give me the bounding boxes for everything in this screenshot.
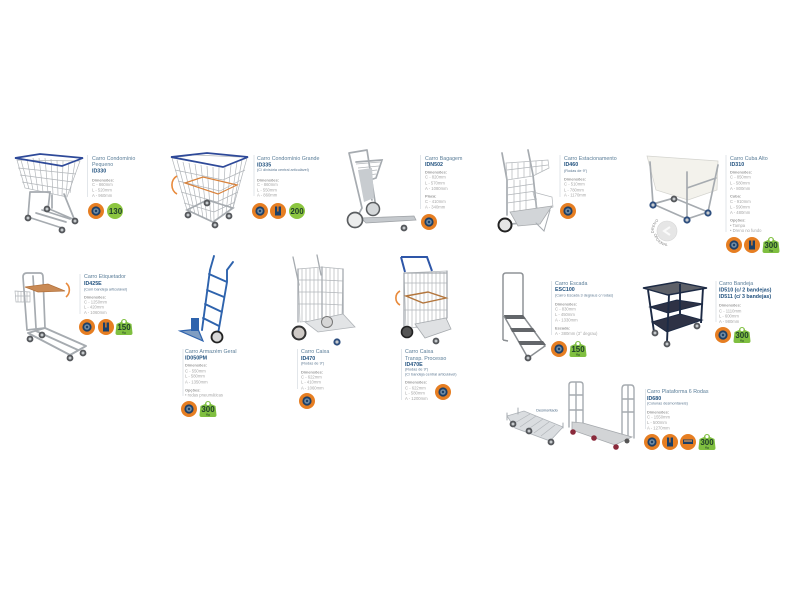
text: plataforma: ID680 bbox=[647, 396, 661, 402]
text: bagagem: C - 820mm bbox=[425, 175, 446, 180]
text: bandeja: ID510 (c/ 2 bandejas) bbox=[719, 288, 772, 294]
product: Carro Armazém Geral bbox=[180, 256, 237, 417]
text: etiquetador: ID425E bbox=[84, 281, 102, 287]
text: plataforma: L - 500mm bbox=[647, 420, 667, 425]
text: bandeja: C - 1110mm bbox=[719, 308, 742, 314]
tray: orange bbox=[185, 177, 237, 194]
text: bandeja: A - 980mm bbox=[719, 319, 740, 324]
text: etiquetador: (Com bandeja articulável) bbox=[84, 288, 128, 292]
text: bandeja: Carro Bandeja bbox=[719, 281, 753, 287]
badges: escada: 150 bbox=[571, 345, 585, 354]
text: cuba: L - 590mm bbox=[730, 204, 750, 210]
text: escada: Escada: bbox=[555, 326, 570, 330]
product: Carro Condomínio Pequeno bbox=[15, 154, 135, 233]
text: bagagem: Dimensões: bbox=[425, 170, 447, 174]
text: escada: A - 380mm (3° degrau) bbox=[555, 331, 598, 336]
text: escada: Dimensões: bbox=[555, 302, 577, 306]
text: bagagem: A - 1080mm bbox=[425, 186, 448, 191]
icon: dreno opcional: OPCIONAL bbox=[654, 234, 668, 246]
product: Carro Caixa bbox=[292, 255, 355, 409]
text: bagagem: L - 570mm bbox=[425, 180, 445, 185]
badges: plataforma bbox=[644, 434, 716, 450]
cart image: caixa bbox=[292, 255, 355, 346]
text: plataforma: C - 1550mm bbox=[647, 414, 671, 420]
text: plataforma bbox=[647, 389, 709, 430]
text: condominio pequeno: Dimensões: bbox=[92, 178, 114, 182]
badges: bandeja: 300 bbox=[735, 331, 749, 340]
badges: cuba: 300 bbox=[764, 241, 778, 250]
product: Carro Plataforma 6 Rodas bbox=[507, 382, 716, 450]
text: cuba: Carro Cuba Alto bbox=[730, 156, 768, 162]
text: bagagem: C - 410mm bbox=[425, 199, 446, 204]
badges: escada bbox=[551, 341, 586, 357]
text: cuba bbox=[730, 156, 768, 233]
text: condominio grande: ID335 bbox=[257, 162, 271, 168]
text: cuba: Cuba: bbox=[730, 194, 741, 198]
text: plataforma: Dimensões: bbox=[647, 410, 669, 414]
text: escada: C - 830mm bbox=[555, 306, 576, 312]
text: plataforma: Carro Plataforma 6 Rodas bbox=[647, 389, 709, 395]
text: bagagem: Carro Bagagem bbox=[425, 156, 463, 162]
cart image: bandeja bbox=[643, 282, 707, 347]
text: estacionamento: Dimensões: bbox=[564, 176, 586, 182]
text: armazem bbox=[185, 349, 237, 398]
badges: etiquetador bbox=[79, 319, 132, 335]
arrow: tray bbox=[396, 291, 400, 305]
text: condominio grande: C - 860mm bbox=[257, 182, 278, 187]
text: bandeja: ID511 (c/ 3 bandejas) bbox=[719, 294, 771, 300]
label: desmontado: Desmontado bbox=[536, 408, 558, 412]
text: condominio grande bbox=[257, 156, 319, 198]
text: estacionamento: ID460 bbox=[564, 162, 578, 168]
text: cuba: • Tampa bbox=[730, 223, 746, 228]
badges: condominio pequeno: 130 bbox=[109, 207, 123, 216]
text: estacionamento: C - 510mm bbox=[564, 182, 585, 187]
text: caixa transporte: A - 1200mm bbox=[405, 396, 428, 401]
badges: armazem: 300 bbox=[201, 405, 215, 414]
badge: estacionamento bbox=[560, 203, 576, 219]
text: condominio grande: L - 550mm bbox=[257, 188, 277, 192]
text: bagagem: IDN502 bbox=[425, 162, 443, 168]
product: Carro Caixa Transp. Processo bbox=[396, 257, 457, 401]
text: etiquetador: Dimensões: bbox=[84, 294, 106, 300]
text: condominio grande: A - 860mm bbox=[257, 192, 278, 198]
text: etiquetador: Carro Etiquetador bbox=[84, 274, 126, 280]
badges: bandeja bbox=[715, 327, 750, 343]
text: armazem: Carro Armazém Geral bbox=[185, 349, 237, 355]
text: bandeja: L - 600mm bbox=[719, 314, 739, 318]
text: caixa: C - 622mm bbox=[301, 374, 322, 380]
text: bandeja: Dimensões: bbox=[719, 302, 741, 308]
text: estacionamento: L - 780mm bbox=[564, 187, 584, 192]
text: caixa: ID470 bbox=[301, 356, 315, 362]
product: Carro Escada bbox=[503, 273, 614, 361]
badges: etiquetador: 150 bbox=[117, 323, 131, 332]
text: etiquetador: L - 420mm bbox=[84, 304, 104, 310]
text: escada: (Carro Escada 3 degraus c/ rodas) bbox=[555, 294, 614, 298]
badges: armazem bbox=[181, 401, 216, 417]
badge: caixa transporte bbox=[435, 384, 451, 400]
text: caixa: L - 410mm bbox=[301, 380, 321, 384]
text: condominio pequeno bbox=[92, 156, 135, 198]
text: caixa: Carro Caixa bbox=[301, 349, 329, 355]
badges: cuba: Kg bbox=[769, 248, 773, 252]
text: cuba: C - 910mm bbox=[730, 199, 751, 204]
text: caixa: A - 1060mm bbox=[301, 386, 324, 390]
text: cuba: • Dreno no fundo bbox=[730, 228, 762, 233]
text: etiquetador: C - 1250mm bbox=[84, 300, 108, 304]
cart image: armazem bbox=[180, 256, 233, 342]
cart image: escada bbox=[503, 273, 546, 361]
text: escada bbox=[555, 281, 614, 336]
cart image: estacionamento bbox=[498, 150, 553, 232]
text: estacionamento: (Rodas de 9") bbox=[564, 169, 588, 173]
text: plataforma: A - 1270mm bbox=[647, 426, 670, 430]
badge: bagagem bbox=[421, 214, 437, 230]
text: caixa transporte: L - 580mm bbox=[405, 390, 425, 396]
text: escada: ESC100 bbox=[555, 287, 575, 293]
icon: dreno opcional: DRENO bbox=[651, 219, 658, 233]
text: caixa transporte: C - 622mm bbox=[405, 386, 426, 390]
text: cuba: A - 480mm bbox=[730, 210, 751, 215]
badge: caixa bbox=[299, 393, 315, 409]
text: caixa transporte bbox=[405, 349, 457, 401]
arrow: tray bbox=[66, 283, 69, 297]
text: condominio pequeno: L - 520mm bbox=[92, 188, 112, 192]
text: cuba: Opções: bbox=[730, 218, 746, 222]
arrow: articulated bbox=[172, 176, 177, 194]
text: cuba: ID310 bbox=[730, 162, 744, 168]
text: escada: L - 450mm bbox=[555, 312, 575, 317]
text: condominio grande: (C/ divisória central articulável) bbox=[257, 168, 310, 172]
cart image: cuba bbox=[647, 156, 718, 224]
text: armazem: • rodas pneumáticas bbox=[185, 392, 223, 398]
text: caixa bbox=[301, 349, 329, 390]
text: escada: Carro Escada bbox=[555, 281, 587, 287]
badges: escada: Kg bbox=[576, 352, 580, 356]
text: caixa transporte: Dimensões: bbox=[405, 380, 427, 384]
text: condominio grande: Carro Condomínio Grande bbox=[257, 156, 319, 162]
text: caixa transporte: (C/ bandeja central articulável) bbox=[405, 372, 457, 376]
text: bandeja bbox=[719, 281, 772, 324]
text: caixa transporte: ID470E bbox=[405, 362, 423, 368]
text: cuba: Dimensões: bbox=[730, 170, 752, 174]
text: armazem: C - 550mm bbox=[185, 368, 206, 374]
badges: condominio grande: 200 bbox=[290, 207, 304, 216]
badges: cuba bbox=[726, 237, 780, 253]
text: armazem: ID050PM bbox=[185, 356, 208, 362]
text: etiquetador: A - 1060mm bbox=[84, 310, 107, 315]
text: caixa transporte: Carro Caixa bbox=[405, 349, 433, 355]
text: estacionamento: A - 1170mm bbox=[564, 193, 587, 198]
text: cuba: C - 850mm bbox=[730, 175, 751, 180]
text: estacionamento: Carro Estacionamento bbox=[564, 156, 617, 162]
badges: armazem: Kg bbox=[206, 412, 210, 416]
cart image: condominio pequeno bbox=[15, 154, 83, 233]
cart image: plataforma bbox=[569, 382, 634, 450]
text: etiquetador bbox=[84, 274, 128, 315]
text: cuba: L - 580mm bbox=[730, 180, 750, 185]
text: armazem: L - 580mm bbox=[185, 374, 205, 378]
text: armazem: Dimensões: bbox=[185, 362, 207, 368]
product: Carro Estacionamento bbox=[498, 150, 617, 232]
cart image: caixa transporte bbox=[396, 257, 451, 344]
text: condominio pequeno: C - 860mm bbox=[92, 182, 113, 187]
badges: plataforma: Kg bbox=[705, 446, 709, 450]
text: caixa: Dimensões: bbox=[301, 370, 323, 374]
text: caixa transporte: Transp. Processo bbox=[405, 356, 446, 362]
badges: etiquetador: Kg bbox=[122, 330, 126, 334]
badges: bandeja: Kg bbox=[740, 338, 744, 342]
product: Carro Etiquetador bbox=[15, 273, 132, 361]
text: condominio grande: Dimensões: bbox=[257, 178, 279, 182]
icon: dreno opcional bbox=[651, 219, 678, 246]
text: armazem: A - 1350mm bbox=[185, 379, 208, 384]
text: bagagem bbox=[425, 156, 463, 210]
text: escada: A - 1330mm bbox=[555, 318, 578, 322]
text: cuba: A - 800mm bbox=[730, 186, 751, 191]
product: Carro Cuba Alto bbox=[644, 155, 780, 292]
cart image: etiquetador bbox=[15, 273, 86, 361]
text: condominio pequeno: A - 960mm bbox=[92, 193, 113, 198]
badges: plataforma: 300 bbox=[700, 438, 714, 447]
badges: condominio grande bbox=[252, 203, 305, 219]
text: armazem: Opções: bbox=[185, 388, 201, 392]
text: condominio pequeno: Carro Condomínio bbox=[92, 156, 135, 162]
cart image: condominio grande bbox=[171, 153, 248, 228]
text: caixa: (Rodas de 9") bbox=[301, 362, 325, 366]
product: Carro Bagagem bbox=[348, 150, 463, 231]
cart image: desmontado bbox=[507, 408, 563, 445]
text: bagagem: Placa: bbox=[425, 194, 436, 198]
product: Carro Condomínio Grande bbox=[171, 153, 319, 228]
text: plataforma: (Colunas desmontáveis) bbox=[647, 402, 689, 406]
cart image: bagagem bbox=[348, 150, 416, 231]
product: Carro Bandeja bbox=[643, 281, 772, 347]
text: estacionamento bbox=[564, 156, 617, 198]
text: caixa transporte: (Rodas de 9") bbox=[405, 368, 429, 372]
text: condominio pequeno: ID330 bbox=[92, 168, 106, 174]
text: bagagem: A - 340mm bbox=[425, 204, 446, 210]
text: condominio pequeno: Pequeno bbox=[92, 162, 113, 168]
